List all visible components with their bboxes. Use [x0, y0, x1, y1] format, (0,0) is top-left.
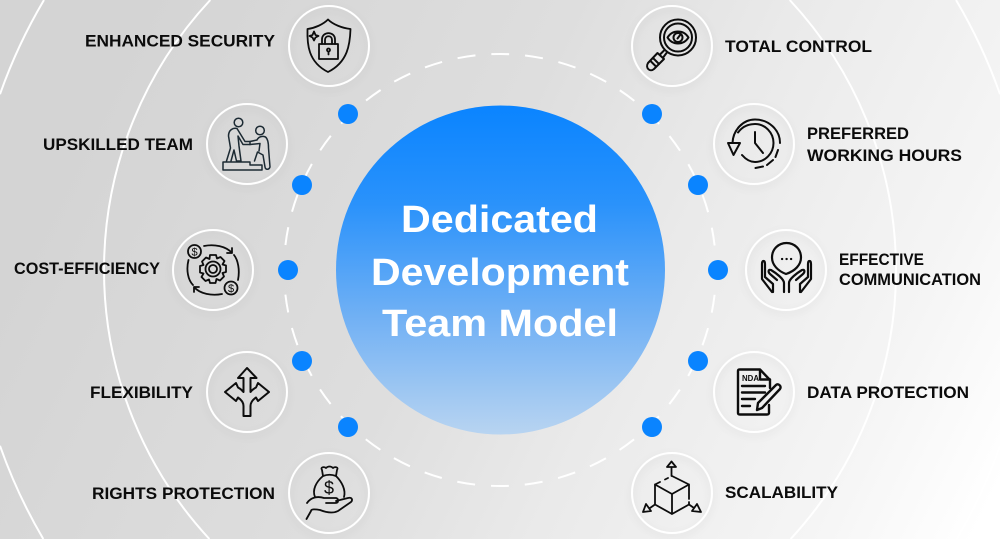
label: COST-EFFICIENCY: [14, 259, 161, 278]
icon: magnifier with eye: [647, 20, 696, 70]
icon: gear and coins: [187, 245, 239, 295]
item: upskilled team: [43, 104, 287, 184]
item: flexibility: [90, 352, 287, 432]
icon ring: [173, 230, 253, 310]
icon: hands and speech bubble: [762, 243, 811, 292]
label: UPSKILLED TEAM: [43, 135, 193, 154]
item: effective communication: [746, 230, 981, 310]
icon: shield and lock: [307, 20, 350, 72]
icon: NDA document and pen: [738, 370, 781, 414]
dollar sign: $: [324, 478, 334, 498]
timeline dots: [278, 104, 728, 437]
icon ring: [714, 352, 794, 432]
label: RIGHTS PROTECTION: [92, 484, 275, 503]
icon: three-way arrow: [225, 368, 269, 416]
icon ring: [746, 230, 826, 310]
item: cost-efficiency: [14, 230, 253, 310]
label: FLEXIBILITY: [90, 383, 194, 402]
label: COMMUNICATION: [839, 270, 981, 289]
icon ring: [632, 453, 712, 533]
label: SCALABILITY: [725, 483, 839, 502]
icon: helping hand: [223, 118, 270, 170]
dashed ring: [284, 54, 716, 486]
dollar signs: $: [228, 283, 234, 295]
central circle: [336, 106, 665, 434]
label: PREFERRED: [807, 124, 909, 143]
title: Dedicated: [401, 199, 598, 241]
dollar signs: [191, 246, 234, 295]
item: enhanced security: [85, 6, 369, 86]
item: total control: [632, 6, 872, 86]
icon: clock with arrow: [728, 120, 780, 168]
label: ENHANCED SECURITY: [85, 32, 276, 50]
icon ring: [207, 352, 287, 432]
title: Team Model: [382, 303, 618, 345]
dollar signs: $: [191, 246, 198, 258]
label: [839, 250, 981, 289]
icon ring: [632, 6, 712, 86]
icon ring: [207, 104, 287, 184]
title: [371, 199, 629, 345]
item: rights protection: [92, 453, 369, 533]
item: data protection: [714, 352, 969, 432]
label: [807, 124, 962, 165]
item: preferred working hours: [714, 104, 962, 184]
item: scalability: [632, 453, 839, 533]
icon: cube with arrows: [643, 462, 701, 514]
label: TOTAL CONTROL: [725, 37, 872, 56]
icon ring: [289, 453, 369, 533]
label: EFFECTIVE: [839, 250, 924, 269]
label: WORKING HOURS: [807, 146, 962, 165]
icon ring: [289, 6, 369, 86]
icon ring: [714, 104, 794, 184]
icon: money bag in hand: [306, 466, 352, 519]
label: DATA PROTECTION: [807, 383, 969, 402]
title: Development: [371, 252, 629, 294]
NDA text: NDA: [742, 373, 759, 383]
